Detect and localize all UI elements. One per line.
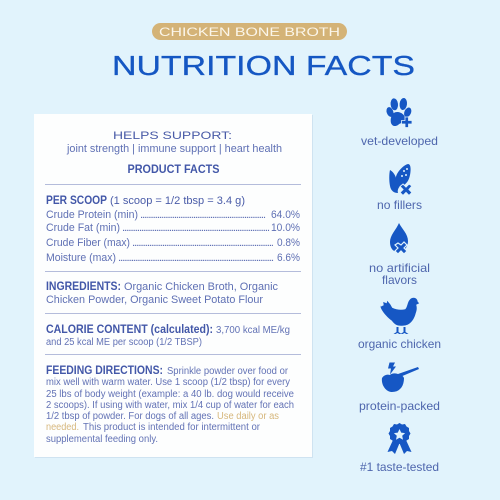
- section: feeding directions: 25 lbs of body weight (example: a 40 lb. dog would receive: [46, 389, 294, 400]
- icon: award ribbon with star: [388, 423, 412, 454]
- heading: product facts: PRODUCT FACTS: [128, 164, 220, 176]
- label: vet-developed: vet-developed: [361, 134, 438, 148]
- section: per scoop: ..............................................................................: [122, 222, 270, 234]
- section: per scoop: [46, 195, 300, 264]
- label: no artificial flavors: [369, 261, 430, 287]
- section: feeding directions: needed.: [46, 422, 79, 433]
- badge: chicken bone broth: [152, 23, 347, 40]
- heading: helps support: HELPS SUPPORT:: [113, 130, 232, 142]
- section: calorie content: CALORIE CONTENT (calculated):: [46, 324, 213, 336]
- section: feeding directions: 1/2 tbsp of powder. For dogs of all ages.: [46, 411, 214, 422]
- section: feeding directions: This product is intended for intermittent or: [83, 422, 261, 433]
- icon: chicken: [380, 298, 419, 334]
- label: no fillers: no fillers: [377, 198, 422, 212]
- section: per scoop: Crude Fiber (max): [46, 237, 130, 249]
- section: per scoop: Moisture (max): [46, 252, 116, 264]
- label: protein-packed: protein-packed: [359, 399, 440, 413]
- section: ingredients: INGREDIENTS:: [46, 281, 121, 293]
- section: feeding directions: 2 scoops). If using with water, mix 1/4 cup of water for each: [46, 400, 294, 411]
- section: per scoop: 10.0%: [271, 222, 300, 234]
- section: per scoop: ...................................................................................: [118, 252, 274, 264]
- label: organic chicken: organic chicken: [358, 337, 441, 351]
- title: NUTRITION FACTS: [112, 50, 415, 81]
- section: feeding directions: Use daily or as: [217, 411, 279, 422]
- label: taste-tested: #1 taste-tested: [360, 460, 439, 474]
- section: ingredients: Organic Chicken Broth, Organic: [124, 281, 278, 293]
- panel: product facts: [34, 114, 313, 458]
- text: support list: joint strength | immune support | heart health: [66, 143, 282, 155]
- section: calorie content: 3,700 kcal ME/kg: [216, 325, 290, 336]
- section: per scoop: Crude Protein (min): [46, 209, 138, 221]
- section: per scoop: PER SCOOP: [46, 195, 107, 207]
- section: per scoop: 6.6%: [277, 252, 300, 264]
- label: no artificial flavors: flavors: [382, 273, 417, 287]
- section: ingredients: Chicken Powder, Organic Sweet Potato Flour: [46, 294, 263, 306]
- section: ingredients: [46, 281, 278, 306]
- section: per scoop: ..................................................................: [140, 209, 266, 221]
- section: feeding directions: mix well with warm water. Use 1 scoop (1/2 tbsp) for every: [46, 377, 290, 388]
- section: per scoop: Crude Fat (min): [46, 222, 120, 234]
- icon: scoop with bolt: [382, 362, 419, 392]
- section: calorie content: [46, 324, 290, 348]
- section: per scoop: (1 scoop = 1/2 tbsp = 3.4 g): [110, 195, 245, 207]
- section: feeding directions: FEEDING DIRECTIONS:: [46, 365, 163, 377]
- section: feeding directions: [46, 365, 294, 445]
- icon: paw with plus: [385, 98, 413, 128]
- section: per scoop: 64.0%: [271, 209, 300, 221]
- icon: drop with x: [390, 223, 408, 254]
- label: no artificial flavors: no artificial: [369, 261, 430, 275]
- section: feeding directions: Sprinkle powder over food or: [167, 366, 289, 377]
- section: feeding directions: supplemental feeding only.: [46, 434, 158, 445]
- section: calorie content: and 25 kcal ME per scoop (1/2 TBSP): [46, 337, 202, 348]
- icon: corn with x: [389, 164, 412, 196]
- badge: chicken bone broth: CHICKEN BONE BROTH: [159, 25, 340, 39]
- section: per scoop: ...........................................................................: [132, 237, 274, 249]
- section: per scoop: 0.8%: [277, 237, 300, 249]
